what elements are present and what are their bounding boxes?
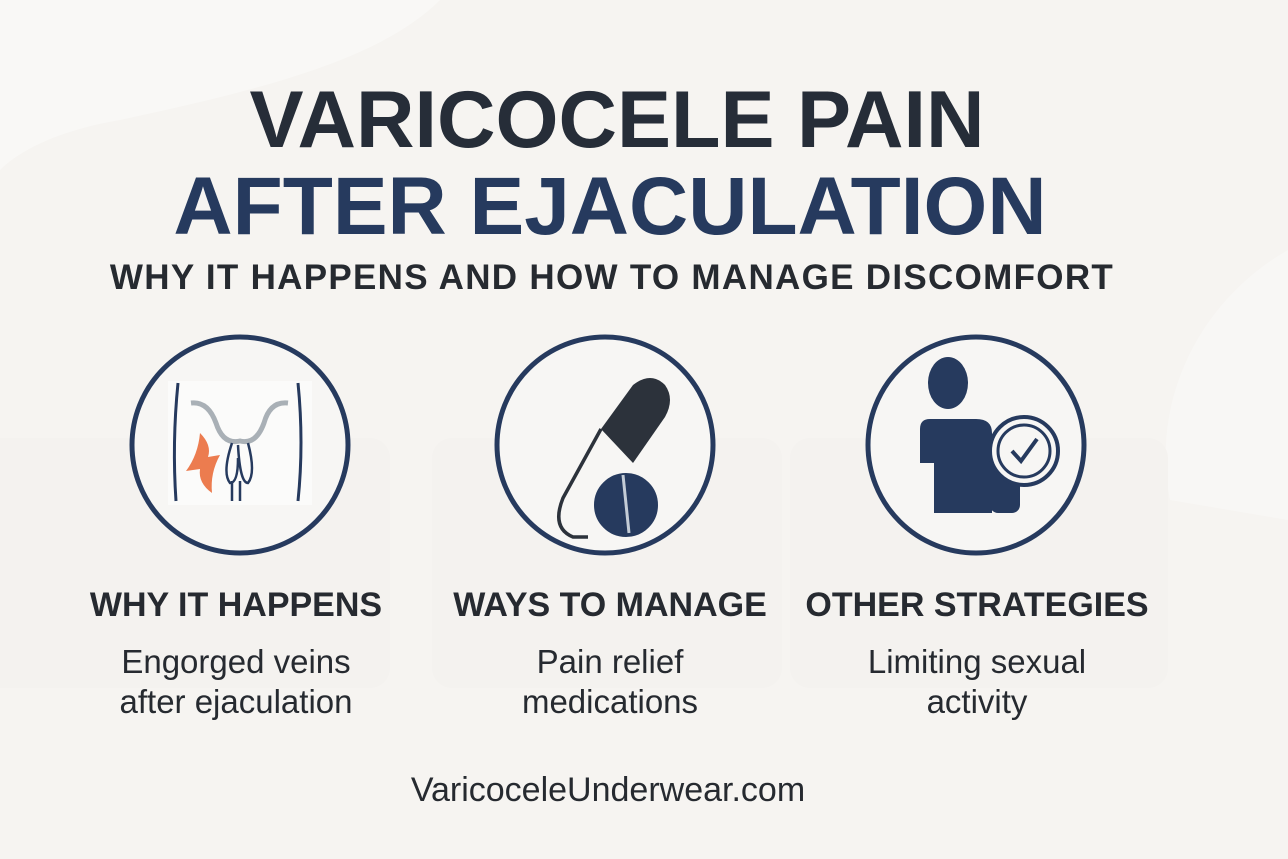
title — [173, 75, 1047, 252]
column: why it happens: WHY IT HAPPENS — [90, 586, 382, 624]
column: why it happens — [90, 586, 382, 720]
column: other strategies: OTHER STRATEGIES — [805, 586, 1149, 624]
column: ways to manage: WAYS TO MANAGE — [453, 586, 767, 624]
column: why it happens: Engorged veins — [121, 643, 351, 680]
subtitle: WHY IT HAPPENS AND HOW TO MANAGE DISCOMFORT — [110, 258, 1114, 297]
column: ways to manage: medications — [522, 683, 698, 720]
icon: person with check — [866, 334, 1086, 556]
icon: pills — [494, 334, 716, 556]
column: ways to manage — [453, 586, 767, 720]
column: other strategies: Limiting sexual — [868, 643, 1086, 680]
column: other strategies — [805, 586, 1149, 720]
column: other strategies: activity — [927, 683, 1027, 720]
footer url: VaricoceleUnderwear.com — [411, 771, 805, 809]
column: why it happens: after ejaculation — [120, 683, 352, 720]
icon: groin with pain — [130, 334, 350, 556]
column: ways to manage: Pain relief — [537, 643, 683, 680]
title: VARICOCELE PAIN — [249, 75, 985, 165]
title: AFTER EJACULATION — [173, 161, 1047, 252]
